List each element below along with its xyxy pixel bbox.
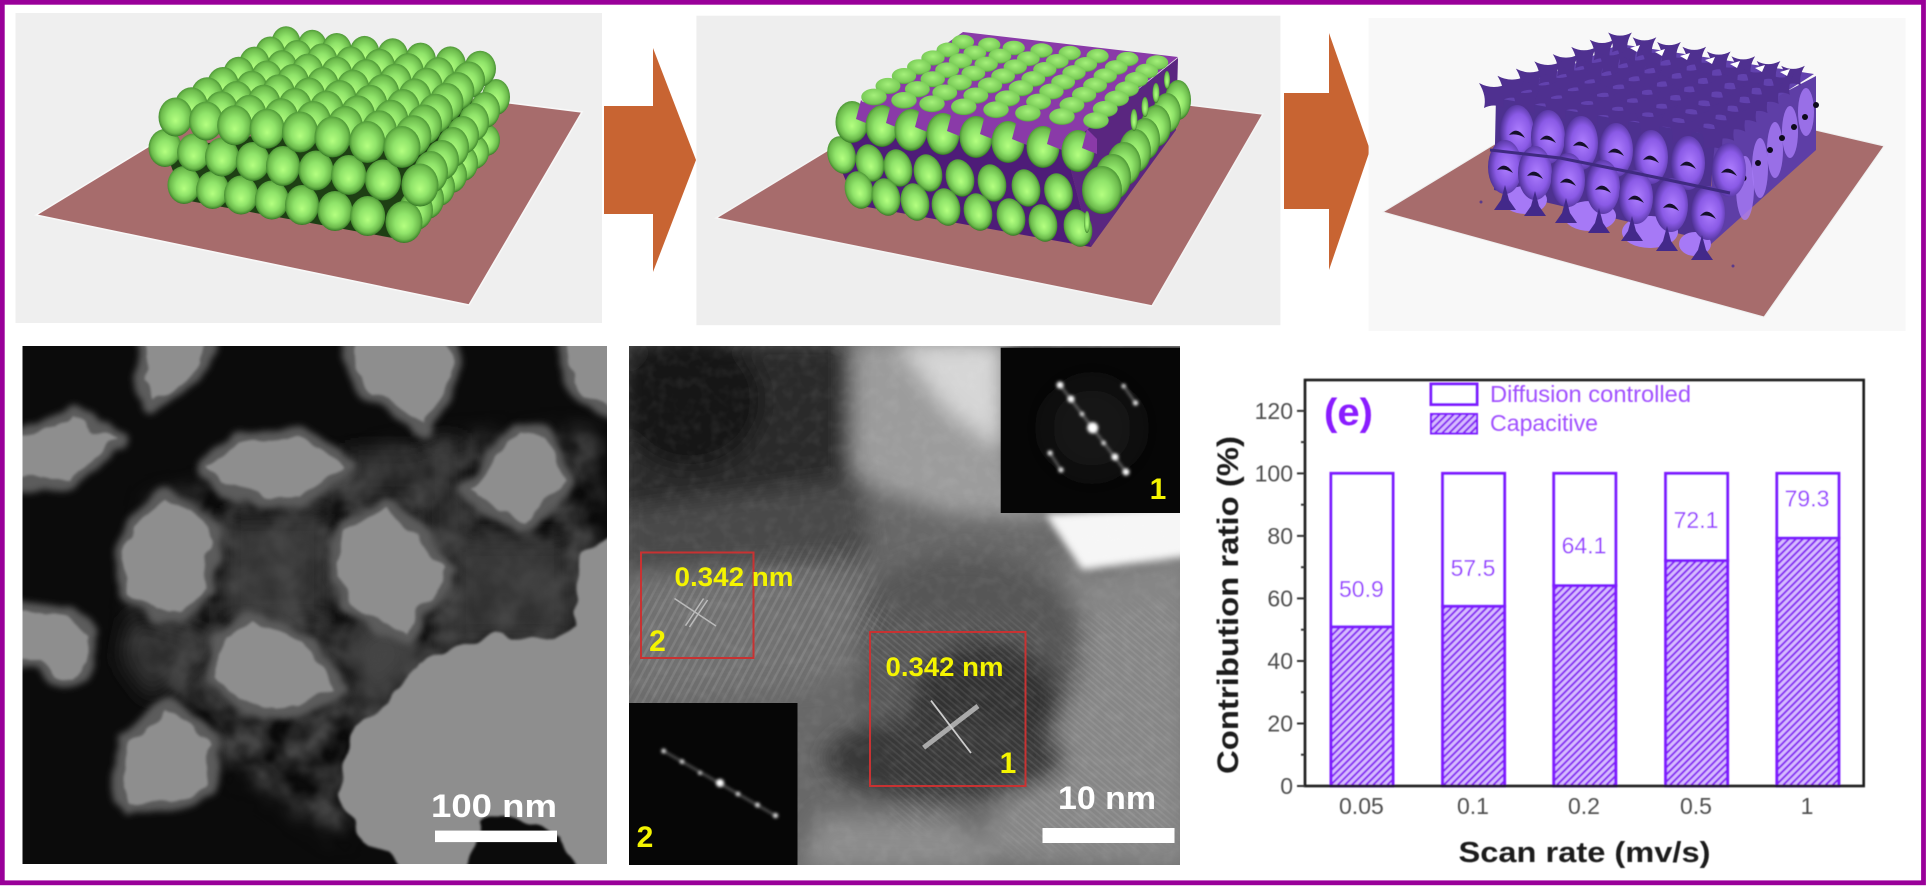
- FFT inset 1: 1: [1150, 473, 1166, 506]
- scale label: 10 nm: [1058, 780, 1156, 816]
- x-axis title: Scan rate (mv/s): [1458, 837, 1710, 869]
- capacitive and diffusion stacked bars: [1331, 473, 1839, 786]
- panel: infiltrated template: [696, 16, 1280, 325]
- panel letter: (e): [1324, 392, 1373, 434]
- region box 2: 2: [649, 625, 666, 658]
- panel: colloidal crystal template on substrate: [16, 13, 602, 323]
- bar value labels: 57.5: [1451, 555, 1495, 581]
- bar chart: contribution ratio: [1212, 380, 1864, 869]
- y-axis labels: 80: [1267, 523, 1293, 549]
- y-axis labels: 100: [1255, 460, 1293, 486]
- x-axis labels: 0.05: [1339, 793, 1384, 819]
- y-axis labels: 0: [1280, 773, 1293, 799]
- scale bar: [435, 831, 557, 842]
- FFT inset 2: 2: [637, 821, 653, 854]
- x-axis labels: 0.1: [1457, 793, 1489, 819]
- x-axis labels: 0.2: [1568, 793, 1600, 819]
- coated sphere stack: [823, 32, 1191, 250]
- y-axis labels: [1255, 398, 1293, 799]
- y-axis labels: 40: [1267, 648, 1293, 674]
- scale label: 100 nm: [431, 788, 557, 824]
- region box 1: 1: [1000, 747, 1016, 780]
- bar value labels: 64.1: [1562, 533, 1606, 559]
- scale bar: [1042, 828, 1174, 843]
- panel: inverse opal scaffold: [1369, 18, 1906, 331]
- axes frame: [1305, 380, 1864, 786]
- x-axis labels: 1: [1801, 793, 1813, 819]
- FFT inset 2: [629, 703, 798, 865]
- y-axis ticks: [1297, 411, 1305, 786]
- sphere stack: [148, 26, 510, 243]
- legend: [1431, 381, 1691, 436]
- bar value labels: 79.3: [1785, 486, 1829, 512]
- region box 2: 0.342 nm: [674, 562, 794, 592]
- region box 2: [641, 552, 794, 658]
- y-axis labels: 120: [1255, 398, 1293, 424]
- arrow: template to infiltrated: [604, 48, 696, 272]
- y-axis title: Contribution ratio (%): [1212, 436, 1245, 774]
- bar value labels: [1339, 486, 1829, 602]
- bar value labels: 50.9: [1339, 576, 1384, 602]
- y-axis labels: 20: [1267, 710, 1293, 736]
- substrate plane: [716, 76, 1263, 306]
- panel: HRTEM micrograph: [618, 332, 1190, 870]
- pores: [10, 335, 620, 880]
- lattice fringes: [620, 340, 1190, 870]
- y-axis labels: 60: [1267, 585, 1293, 611]
- scaffold lattice: [1479, 33, 1819, 267]
- bar value labels: 72.1: [1674, 507, 1718, 533]
- panel: TEM micrograph: [10, 335, 620, 880]
- x-axis labels: [1339, 793, 1813, 819]
- FFT inset 1: [1001, 348, 1180, 513]
- legend: Diffusion controlled: [1490, 381, 1691, 407]
- region box 1: [870, 632, 1026, 786]
- substrate plane: [1383, 80, 1884, 317]
- substrate plane: [36, 73, 582, 305]
- region box 1: 0.342 nm: [886, 652, 1004, 682]
- x-axis labels: 0.5: [1680, 793, 1712, 819]
- arrow: infiltrated to scaffold: [1284, 33, 1370, 270]
- legend: Capacitive: [1490, 410, 1598, 436]
